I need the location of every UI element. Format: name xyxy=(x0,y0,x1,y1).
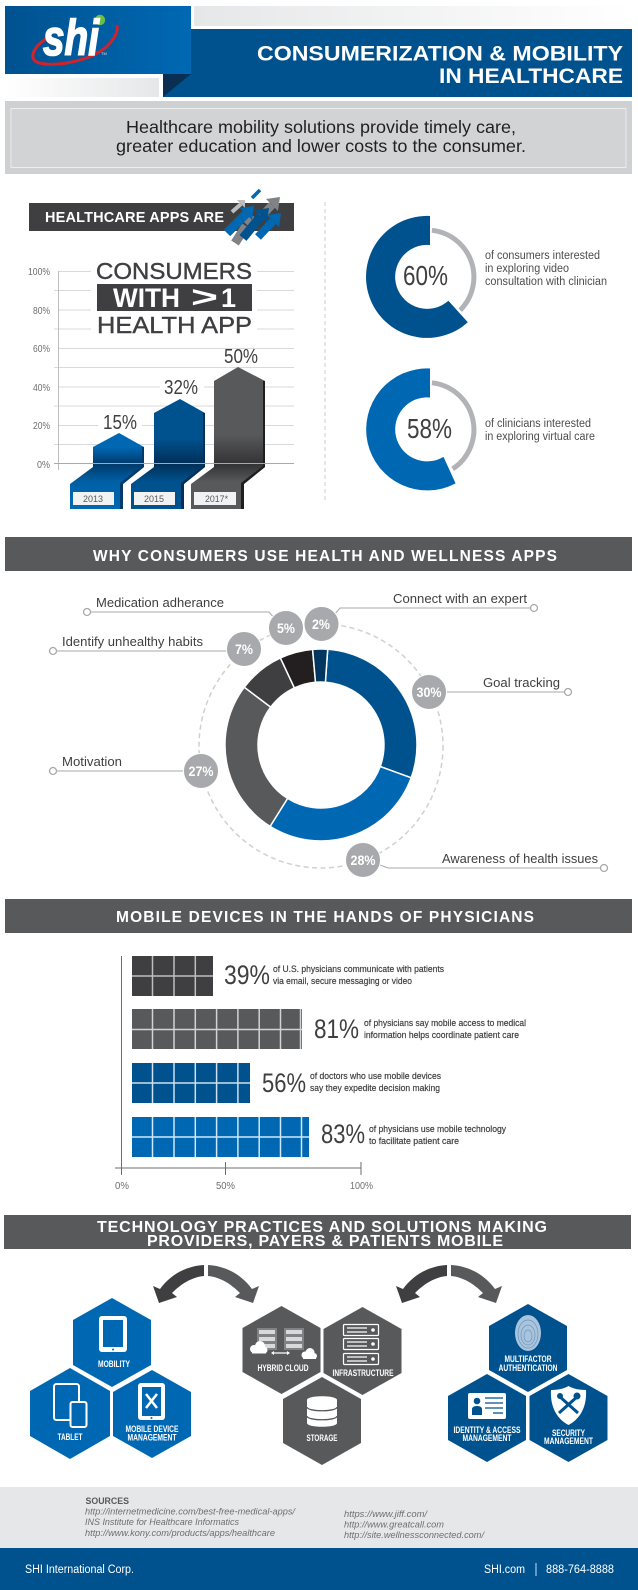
hexagon: mobile device management: MOBILE DEVICE xyxy=(126,1424,178,1434)
hexagon: identity and access management xyxy=(448,1374,526,1462)
intro panel xyxy=(5,101,632,174)
label: connect with an expert 2%: Connect with an expert xyxy=(393,591,527,606)
axis labels: 100% xyxy=(350,1181,373,1192)
hexagon: multifactor authentication: AUTHENTICATION xyxy=(498,1363,558,1373)
donut: 60 percent: 60% xyxy=(403,260,448,291)
label: identify unhealthy habits 7%: 7% xyxy=(235,642,253,657)
text: consumers interested: in exploring video xyxy=(485,263,569,275)
logo block: shi xyxy=(43,10,100,66)
chart title: 1 xyxy=(221,283,236,313)
text: consumers interested: of consumers interested xyxy=(485,250,600,262)
label: medication adherance 5% xyxy=(84,595,304,646)
title xyxy=(257,42,623,88)
panel: healthcare apps chart xyxy=(28,190,294,509)
axis labels: 50% xyxy=(216,1181,235,1192)
hexagon: multifactor authentication xyxy=(489,1304,567,1392)
bar: 83 percent xyxy=(132,1117,506,1157)
logo block: TM xyxy=(101,51,107,56)
footer bar: SHI International Corp. xyxy=(25,1564,134,1576)
arrows: second pair xyxy=(396,1265,502,1303)
hexagon: infrastructure xyxy=(324,1307,402,1395)
logo block xyxy=(5,6,191,74)
label: motivation 27%: 27% xyxy=(188,764,214,779)
heading: technology practices: PROVIDERS, PAYERS & PATIENTS MOBILE xyxy=(147,1233,503,1250)
label: goal tracking 30% xyxy=(412,674,572,710)
bar: 39 percent: 39% xyxy=(224,960,270,990)
icon: database xyxy=(307,1396,337,1427)
footer bar: SHI.com xyxy=(484,1564,525,1576)
hexagon: identity and access management: MANAGEMENT xyxy=(462,1433,512,1443)
chart grid and axis: 80% xyxy=(33,306,50,317)
label: motivation 27%: Motivation xyxy=(62,754,122,769)
title: IN HEALTHCARE xyxy=(439,65,623,88)
hexagon: hybrid cloud: HYBRID CLOUD xyxy=(258,1363,309,1373)
bar: 81 percent: 81% xyxy=(314,1014,359,1044)
text: clinicians interested xyxy=(485,418,595,443)
arrows: first pair xyxy=(153,1265,259,1303)
sources panel: http://internetmedicine.com/best-free-medical-apps/ xyxy=(85,1506,296,1518)
text: consumers interested xyxy=(485,250,607,288)
hexagon: tablet: TABLET xyxy=(58,1432,83,1442)
bar 2017: 50% xyxy=(224,346,258,368)
sources panel: INS Institute for Healthcare Informatics xyxy=(85,1517,239,1528)
chart title: WITH xyxy=(113,283,180,313)
hexagon: infrastructure: INFRASTRUCTURE xyxy=(332,1368,394,1378)
text: consumers interested: consultation with clinician xyxy=(485,276,607,288)
icon: id card xyxy=(468,1393,506,1419)
hexagon: storage xyxy=(283,1377,361,1465)
donut: 60 percent xyxy=(366,216,607,338)
donut: 58 percent xyxy=(366,368,595,490)
chart grid and axis: 60% xyxy=(33,344,50,355)
label: identify unhealthy habits 7%: Identify unhealthy habits xyxy=(62,634,203,649)
bar: 81 percent xyxy=(132,1009,526,1049)
bar: 56 percent: of doctors who use mobile devices xyxy=(310,1071,441,1082)
footer bar xyxy=(0,1548,638,1590)
bar: 56 percent: 56% xyxy=(262,1068,306,1098)
icon: two tablets xyxy=(54,1384,86,1427)
icon: servers and clouds xyxy=(250,1328,317,1359)
bar: 83 percent: of physicians use mobile technology xyxy=(369,1124,506,1135)
title: CONSUMERIZATION & MOBILITY xyxy=(257,42,623,66)
intro panel: Healthcare mobility solutions provide timely care, xyxy=(126,117,516,137)
hexagon: security management: SECURITY xyxy=(552,1428,585,1438)
text: clinicians interested: of clinicians interested xyxy=(485,418,591,430)
sources panel: http://site.wellnessconnected.com/ xyxy=(344,1530,485,1541)
hexagon: identity and access management: IDENTITY & ACCESS xyxy=(454,1425,520,1435)
hexagon: mobility xyxy=(73,1298,151,1387)
text: clinicians interested: in exploring virtual care xyxy=(485,431,595,443)
hexagon: mobility: MOBILITY xyxy=(98,1359,130,1369)
hexagon: multifactor authentication: MULTIFACTOR xyxy=(504,1354,552,1364)
chart title xyxy=(96,258,252,338)
bar: 83 percent: to facilitate patient care xyxy=(369,1136,459,1147)
chart grid and axis: 100% xyxy=(28,267,50,278)
label: awareness of health issues 28%: Awareness of health issues xyxy=(442,851,598,866)
chart grid and axis xyxy=(28,258,294,471)
hexagon: hybrid cloud xyxy=(242,1306,320,1394)
donut: 58 percent: 58% xyxy=(407,413,452,444)
hexagon: mobile device management xyxy=(113,1370,191,1458)
axes xyxy=(115,956,361,1175)
hexagon: security management: MANAGEMENT xyxy=(544,1436,593,1446)
label: identify unhealthy habits 7% xyxy=(50,632,262,666)
chart grid and axis: 0% xyxy=(37,460,50,471)
label: connect with an expert 2% xyxy=(304,591,538,642)
hexagon: mobile device management: MANAGEMENT xyxy=(128,1432,177,1442)
heading: why consumers use apps: WHY CONSUMERS USE HEALTH AND WELLNESS APPS xyxy=(93,548,557,565)
bar: 83 percent: 83% xyxy=(321,1119,365,1149)
footer bar: 888-764-8888 xyxy=(546,1564,614,1576)
bar: 81 percent: of physicians say mobile access to medical xyxy=(364,1018,526,1029)
label: medication adherance 5%: 5% xyxy=(277,621,295,636)
heading: technology practices xyxy=(4,1215,631,1250)
bar: 39 percent xyxy=(132,956,444,996)
label: motivation 27% xyxy=(50,754,218,788)
bar 2017 xyxy=(191,346,265,509)
icon: rising arrows xyxy=(227,190,281,243)
chart title: CONSUMERS xyxy=(96,258,252,284)
sources panel: https://www.jiff.com/ xyxy=(344,1509,428,1520)
icon: server stack xyxy=(344,1324,378,1364)
icon: fingerprint xyxy=(515,1315,541,1351)
bar 2013 xyxy=(70,412,144,509)
chart title: > xyxy=(191,281,218,314)
chart grid and axis: 20% xyxy=(33,421,50,432)
axis labels xyxy=(115,1181,373,1192)
donut ring segments xyxy=(225,649,417,841)
bar 2015: 2015 xyxy=(144,494,164,505)
bar 2015: 32% xyxy=(164,377,198,399)
label: connect with an expert 2%: 2% xyxy=(312,617,330,632)
icon: shield with tools xyxy=(551,1386,586,1425)
bar 2017: 2017* xyxy=(205,494,228,505)
hexagon: security management xyxy=(530,1374,608,1462)
icon: device with tools xyxy=(138,1383,165,1420)
label: goal tracking 30%: Goal tracking xyxy=(483,675,560,690)
heading: mobile devices xyxy=(5,899,632,933)
intro panel: greater education and lower costs to the consumer. xyxy=(116,136,526,156)
hexagon: tablet xyxy=(30,1368,110,1459)
heading: why consumers use apps xyxy=(5,537,632,571)
icon: tablet xyxy=(99,1316,127,1352)
panel: physician bar chart xyxy=(115,956,526,1192)
bar 2015 xyxy=(131,377,205,509)
hexagon: storage: STORAGE xyxy=(306,1433,338,1443)
bar 2013: 2013 xyxy=(83,494,103,505)
sources panel: http://www.greatcall.com xyxy=(344,1520,444,1530)
label: goal tracking 30%: 30% xyxy=(416,685,442,700)
sources panel: http://www.kony.com/products/apps/healthcare xyxy=(85,1528,275,1539)
heading: technology practices: TECHNOLOGY PRACTICES AND SOLUTIONS MAKING xyxy=(97,1219,547,1236)
bar: 56 percent: say they expedite decision making xyxy=(310,1083,440,1094)
label: awareness of health issues 28% xyxy=(346,842,608,878)
label: awareness of health issues 28%: 28% xyxy=(350,853,376,868)
sources panel xyxy=(0,1487,638,1548)
panel: donut chart of reasons xyxy=(50,591,608,878)
heading bar: healthcare apps are xyxy=(29,203,294,231)
axis labels: 0% xyxy=(115,1181,129,1192)
label: medication adherance 5%: Medication adherance xyxy=(96,595,224,610)
header banner xyxy=(5,6,632,97)
bar: 39 percent: of U.S. physicians communicate with patients xyxy=(273,964,444,975)
sources panel: SOURCES xyxy=(86,1496,129,1507)
bar: 39 percent: via email, secure messaging or video xyxy=(273,976,412,987)
bar: 81 percent: information helps coordinate patient care xyxy=(364,1030,519,1041)
chart grid and axis: 40% xyxy=(33,383,50,394)
heading: mobile devices: MOBILE DEVICES IN THE HANDS OF PHYSICIANS xyxy=(116,909,534,926)
bar 2013: 15% xyxy=(103,412,137,434)
chart title: HEALTH APP xyxy=(97,312,252,338)
bar: 56 percent xyxy=(132,1063,441,1103)
heading bar: healthcare apps are: HEALTHCARE APPS ARE xyxy=(45,210,224,226)
